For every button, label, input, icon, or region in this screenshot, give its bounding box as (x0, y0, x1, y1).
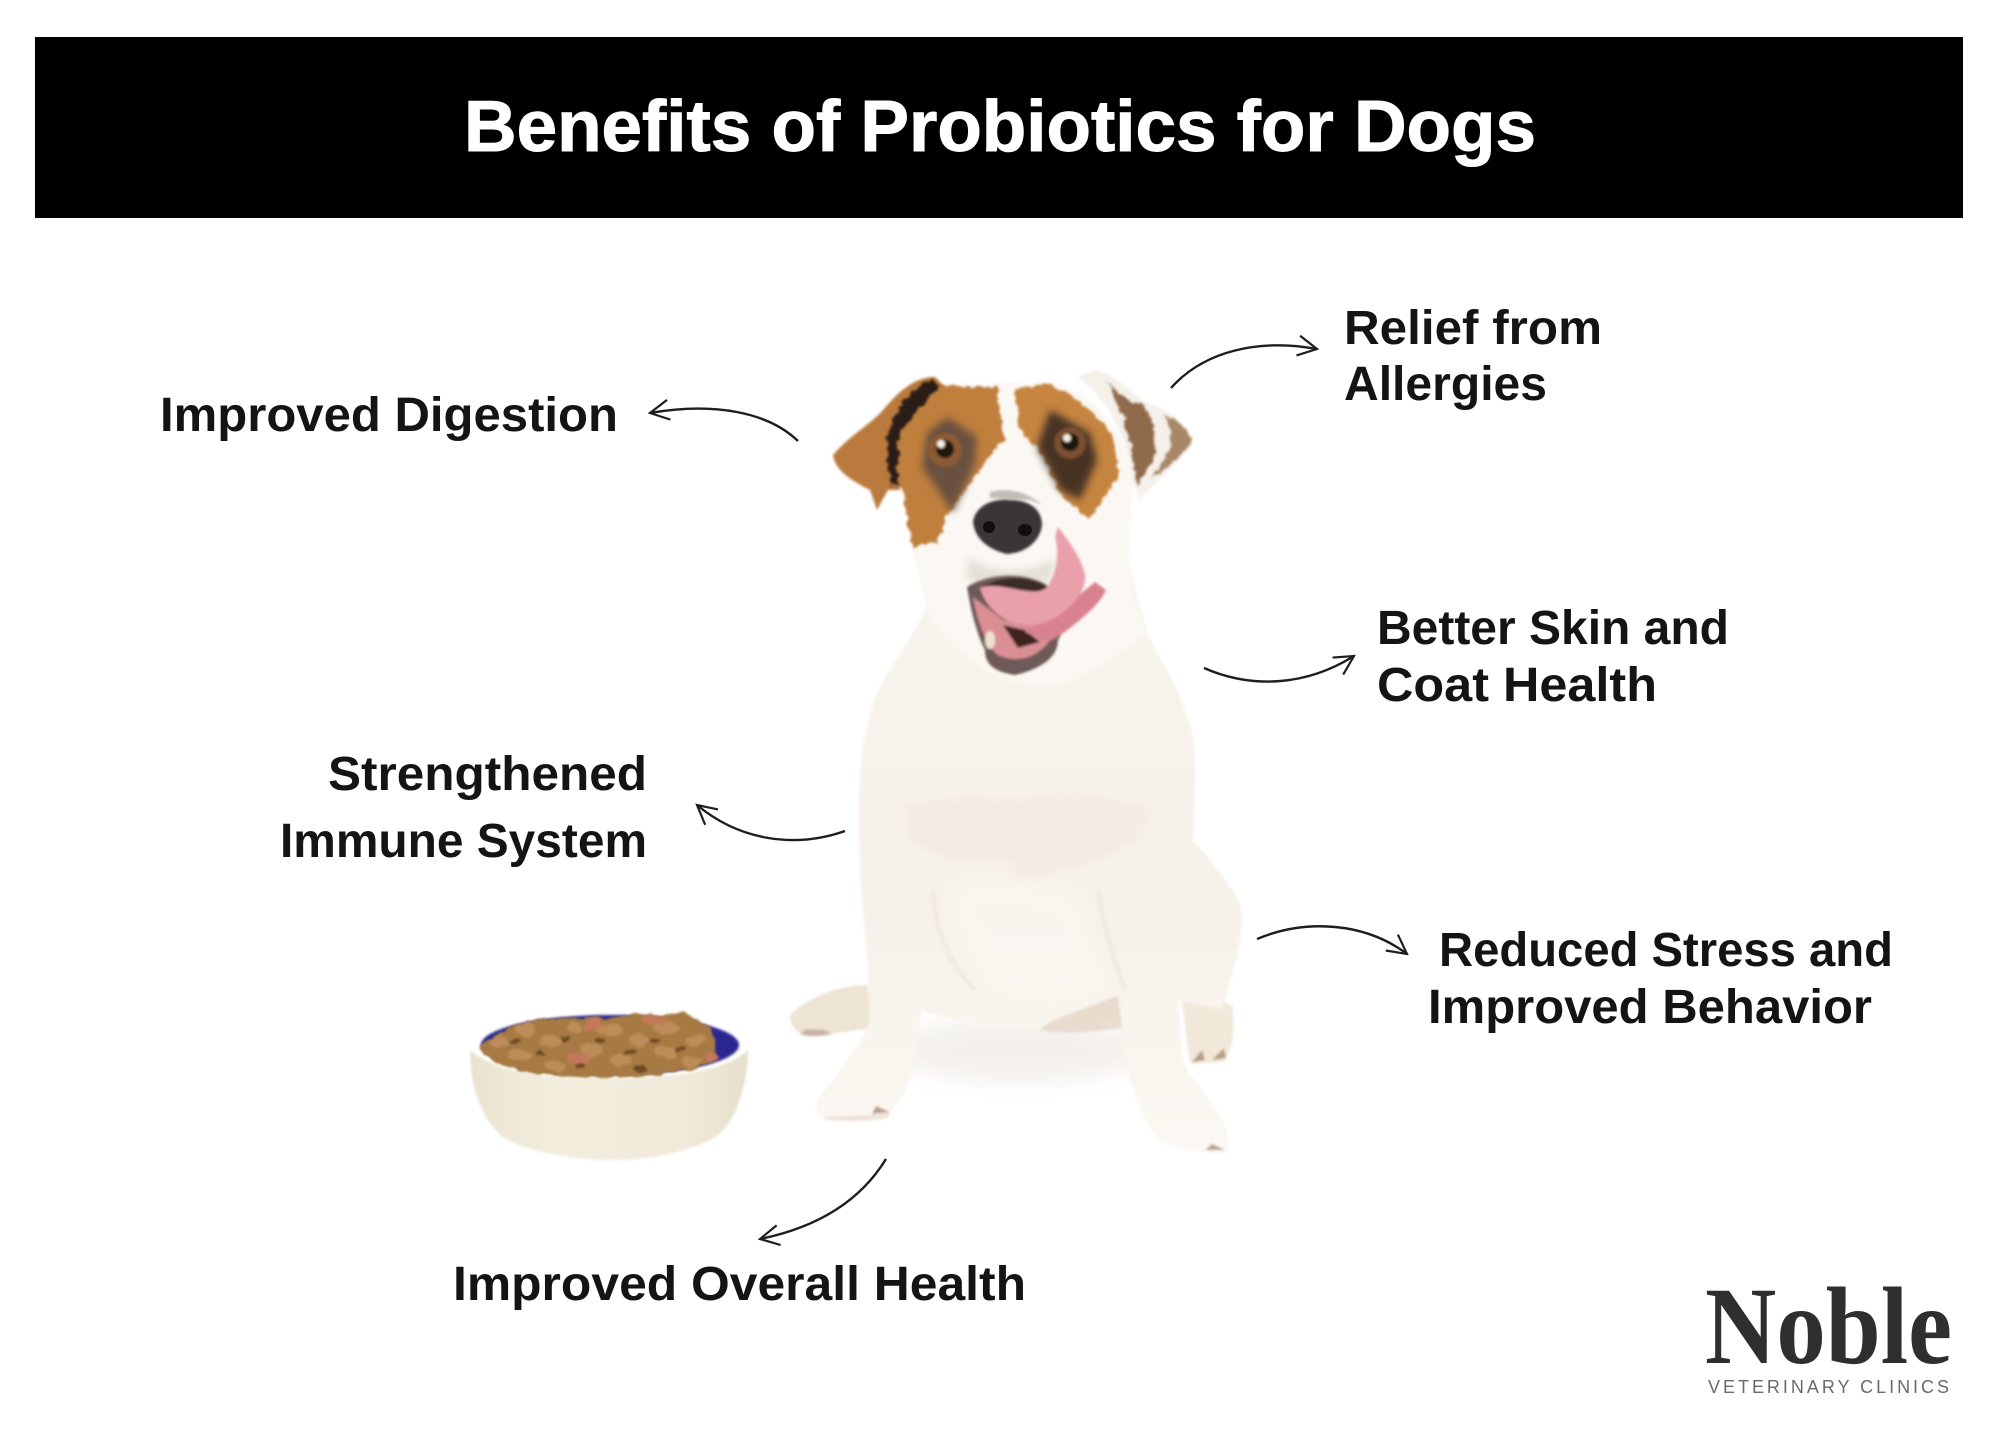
arrow: stress and behavior (1257, 926, 1407, 954)
illustration: dog (790, 370, 1242, 1153)
benefit label: overall health: Improved Overall Health (453, 1258, 1026, 1311)
nose (973, 500, 1042, 554)
benefit label: relief from allergies (1344, 302, 1602, 411)
muzzle shade (966, 555, 1055, 588)
brown face patch right (1015, 383, 1120, 520)
brown face patch left (897, 385, 1004, 547)
dog head (833, 370, 1193, 686)
benefit label: relief from allergies: Relief from (1344, 302, 1602, 355)
tongue (1025, 582, 1106, 642)
arrow: immune system (697, 805, 845, 840)
dog body (790, 547, 1242, 1153)
benefit label: skin and coat (1377, 602, 1729, 712)
mouth (967, 527, 1106, 675)
right ear (1077, 370, 1193, 500)
bowl body (470, 1050, 748, 1160)
eyes (928, 427, 1086, 467)
dark eye masks (922, 417, 977, 513)
benefit label: skin and coat: Better Skin and (1377, 602, 1729, 655)
logo: Noble Veterinary Clinics: Noble (1705, 1265, 1952, 1387)
benefit label: stress and behavior (1428, 924, 1893, 1034)
illustration: bowl of kibble (470, 1013, 748, 1160)
benefit label: relief from allergies: Allergies (1344, 358, 1547, 411)
arrow: improved digestion (650, 409, 798, 441)
benefit label: immune system: Strengthened (328, 748, 647, 801)
benefit label: stress and behavior: Reduced Stress and (1439, 924, 1893, 977)
kibble (480, 1013, 719, 1078)
logo: Noble Veterinary Clinics: VETERINARY CLINICS (1708, 1377, 1949, 1397)
arrow: overall health (760, 1159, 886, 1239)
arrow: relief from allergies (1171, 345, 1317, 388)
benefit label: immune system: Immune System (280, 815, 647, 868)
benefit label: immune system (280, 748, 647, 868)
header banner (35, 37, 1963, 218)
benefit label: skin and coat: Coat Health (1377, 659, 1657, 712)
bowl inside (481, 1015, 739, 1075)
title: Benefits of Probiotics for Dogs (464, 87, 1536, 167)
benefit label: improved digestion: Improved Digestion (160, 389, 618, 442)
arrow: skin and coat (1204, 656, 1354, 682)
left ear (833, 377, 945, 510)
benefit label: stress and behavior: Improved Behavior (1428, 981, 1872, 1034)
